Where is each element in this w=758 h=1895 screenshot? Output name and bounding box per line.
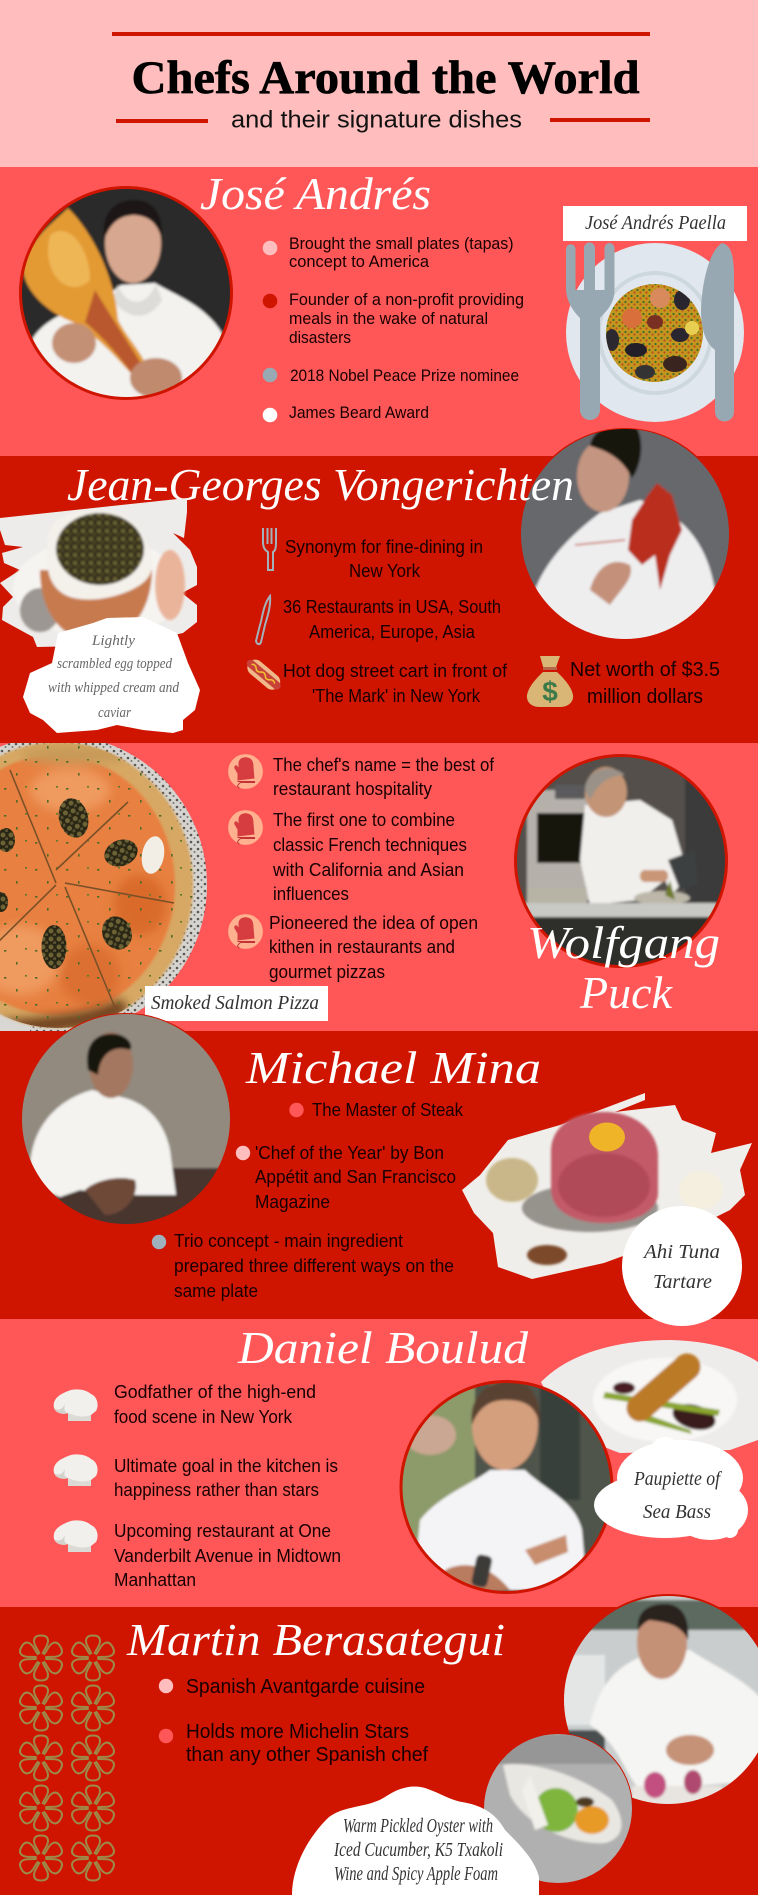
panel: Jean-Georges Vongerichten bbox=[0, 424, 735, 733]
bullet: Spanish Avantgarde: Spanish Avantgarde cuisine bbox=[186, 1675, 425, 1698]
fact: upcoming restaurant: Upcoming restaurant at One bbox=[114, 1520, 331, 1541]
callout cloud: egg description: caviar bbox=[98, 705, 131, 721]
photo: Jean-Georges with lobster bbox=[521, 428, 729, 639]
icon: hot dog bbox=[243, 655, 285, 694]
fact with oven mitt icon: French techniques: classic French techniques bbox=[273, 834, 467, 855]
fact: hot dog cart: Hot dog street cart in front of bbox=[283, 660, 508, 681]
name heading: Michael Mina: Michael Mina bbox=[245, 1042, 541, 1093]
panel: Martin Berasategui bbox=[18, 1590, 758, 1895]
icon: knife outline bbox=[256, 596, 270, 644]
fact with oven mitt icon: French techniques bbox=[228, 809, 467, 904]
icon: fork outline bbox=[263, 528, 276, 570]
bullet: Chef of the Year: 'Chef of the Year' by Bon bbox=[255, 1142, 444, 1163]
bullet list: José Andrés facts: disasters bbox=[289, 329, 351, 347]
dish photo: oyster with foam bbox=[484, 1734, 632, 1883]
bullet list: José Andrés facts: meals in the wake of natural bbox=[289, 310, 488, 328]
bullet list: José Andrés facts: concept to America bbox=[289, 253, 430, 271]
callout blob: oyster description: Wine and Spicy Apple Foam bbox=[334, 1863, 498, 1885]
callout cloud: egg description: with whipped cream and bbox=[48, 680, 179, 696]
callout blob: oyster description: Warm Pickled Oyster with bbox=[343, 1815, 493, 1837]
name heading: Jean-Georges Vongerichten: Jean-Georges Vongerichten bbox=[67, 459, 574, 510]
bullet list: José Andrés facts: Founder of a non-profit providing bbox=[289, 291, 524, 309]
section background: Wolfgang Puck bbox=[0, 743, 758, 1031]
dish photo: caviar egg on white brush bbox=[0, 498, 197, 647]
fact with oven mitt icon: hospitality bbox=[228, 754, 495, 799]
panel: Wolfgang Puck bbox=[0, 735, 735, 1035]
callout blob: oyster description bbox=[292, 1786, 539, 1895]
callout cloud: egg description: Lightly bbox=[91, 633, 135, 649]
name heading: Wolfgang Puck bbox=[527, 917, 720, 1018]
bullet list: José Andrés facts: Brought the small plates (tapas) bbox=[289, 235, 514, 253]
caption: José Andrés Paella: José Andrés Paella bbox=[585, 212, 726, 234]
section background: José Andrés bbox=[0, 167, 758, 456]
subtitle: and their signature dishes bbox=[231, 106, 522, 134]
panel: José Andrés bbox=[15, 168, 747, 422]
caption: José Andrés Paella bbox=[563, 206, 747, 241]
fact: happiness bbox=[114, 1455, 338, 1500]
icon: chef hat 1 bbox=[54, 1389, 98, 1421]
name heading: Wolfgang Puck: Puck bbox=[579, 967, 674, 1018]
bullet: Trio concept: Trio concept - main ingredient bbox=[174, 1230, 403, 1251]
fact with oven mitt icon: hospitality: The chef's name = the best of bbox=[273, 754, 495, 775]
fact: fine dining: New York bbox=[349, 560, 421, 581]
fact with oven mitt icon: open kitchen: kithen in restaurants and bbox=[269, 936, 455, 957]
bullet: Chef of the Year: Magazine bbox=[255, 1191, 330, 1212]
name heading: Martin Berasategui: Martin Berasategui bbox=[126, 1614, 505, 1665]
bullet: Trio concept bbox=[152, 1230, 454, 1301]
fact: restaurants bbox=[283, 596, 501, 642]
photo: Daniel Boulud bbox=[395, 1375, 620, 1600]
section background: Martin Berasategui bbox=[0, 1607, 758, 1895]
icon: chef hat 2 bbox=[54, 1454, 98, 1486]
fact: happiness: happiness rather than stars bbox=[114, 1479, 319, 1500]
panel: header bbox=[112, 32, 650, 134]
dish photo: Paupiette of Sea Bass bbox=[541, 1340, 758, 1453]
bullet list: José Andrés facts: James Beard Award bbox=[289, 404, 429, 422]
fact: restaurants: 36 Restaurants in USA, South bbox=[283, 596, 501, 617]
fact with oven mitt icon: open kitchen: Pioneered the idea of open bbox=[269, 912, 478, 933]
icon: money bag bbox=[527, 656, 573, 707]
fact: Godfather: Godfather of the high-end bbox=[114, 1381, 316, 1402]
caption circle: Ahi Tuna Tartare: Ahi Tuna bbox=[642, 1241, 720, 1263]
fact: Godfather bbox=[114, 1381, 316, 1427]
callout cloud: Paupiette of Sea Bass bbox=[594, 1437, 748, 1540]
caption circle: Ahi Tuna Tartare: Tartare bbox=[653, 1271, 712, 1293]
fact with oven mitt icon: French techniques: with California and Asian bbox=[272, 859, 464, 880]
bullet: Chef of the Year: Appétit and San Francisco bbox=[255, 1166, 456, 1187]
callout cloud: egg description bbox=[23, 617, 200, 733]
dish photo: Ahi Tuna Tartare on white brush bbox=[462, 1093, 752, 1279]
bullet: Michelin Stars: Holds more Michelin Stars bbox=[186, 1720, 409, 1743]
icon: chef hat 3 bbox=[54, 1520, 98, 1552]
photo: José Andrés holding a ham bbox=[19, 186, 233, 400]
fact: upcoming restaurant: Vanderbilt Avenue in Midtown bbox=[114, 1545, 341, 1566]
section background: Daniel Boulud bbox=[0, 1319, 758, 1607]
callout cloud: Paupiette of Sea Bass: Sea Bass bbox=[643, 1501, 711, 1523]
header background bbox=[0, 0, 758, 167]
bullet: Master of Steak: The Master of Steak bbox=[312, 1099, 464, 1120]
fact: restaurants: America, Europe, Asia bbox=[309, 621, 476, 642]
fact: fine dining: Synonym for fine-dining in bbox=[285, 536, 483, 557]
fact with oven mitt icon: French techniques: influences bbox=[273, 883, 349, 904]
bullet: Trio concept: prepared three different ways on the bbox=[174, 1255, 454, 1276]
photo: Martin Berasategui bbox=[555, 1590, 758, 1810]
name heading: Daniel Boulud: Daniel Boulud bbox=[237, 1322, 529, 1373]
fact: upcoming restaurant: Manhattan bbox=[114, 1569, 196, 1590]
caption: Smoked Salmon Pizza bbox=[145, 986, 328, 1021]
name heading: José Andrés: José Andrés bbox=[200, 168, 431, 219]
fact: hot dog cart bbox=[283, 660, 508, 706]
photo: Wolfgang Puck cooking bbox=[514, 754, 728, 968]
fact: fine dining bbox=[285, 536, 483, 581]
section background: Jean-Georges Vongerichten bbox=[0, 456, 758, 743]
dish photo: smoked salmon pizza bbox=[0, 735, 207, 1035]
photo: Michael Mina bbox=[15, 1010, 235, 1230]
section background: Michael Mina bbox=[0, 1031, 758, 1319]
fact with oven mitt icon: French techniques: The first one to combine bbox=[273, 809, 455, 830]
fact: net worth: Net worth of $3.5 bbox=[570, 658, 720, 681]
bullet list: José Andrés facts bbox=[263, 235, 524, 422]
bullet list: José Andrés facts: 2018 Nobel Peace Prize nominee bbox=[290, 367, 519, 385]
fact: hot dog cart: 'The Mark' in New York bbox=[312, 685, 481, 706]
fact: net worth: million dollars bbox=[587, 685, 703, 708]
fact: happiness: Ultimate goal in the kitchen is bbox=[114, 1455, 338, 1476]
caption: Smoked Salmon Pizza: Smoked Salmon Pizza bbox=[151, 992, 319, 1014]
fact with oven mitt icon: open kitchen: gourmet pizzas bbox=[269, 961, 385, 982]
callout cloud: egg description: scrambled egg topped bbox=[57, 656, 172, 672]
bullet: Michelin Stars: than any other Spanish chef bbox=[186, 1743, 428, 1766]
fact: Godfather: food scene in New York bbox=[114, 1406, 293, 1427]
bullet: Chef of the Year bbox=[236, 1142, 456, 1212]
fact with oven mitt icon: open kitchen bbox=[228, 912, 478, 982]
panel: Michael Mina bbox=[15, 1010, 752, 1326]
icon: plate with paella, fork and knife bbox=[566, 243, 744, 422]
bullet: Michelin Stars bbox=[159, 1720, 428, 1766]
title: Chefs Around the World bbox=[132, 52, 640, 104]
fact with oven mitt icon: hospitality: restaurant hospitality bbox=[273, 778, 433, 799]
name heading: Wolfgang Puck: Wolfgang bbox=[527, 917, 720, 968]
callout cloud: Paupiette of Sea Bass: Paupiette of bbox=[633, 1468, 722, 1490]
callout blob: oyster description: Iced Cucumber, K5 Txakoli bbox=[333, 1839, 503, 1861]
icon: money bag: $ bbox=[542, 676, 558, 707]
fact: upcoming restaurant bbox=[114, 1520, 341, 1590]
panel: Daniel Boulud bbox=[54, 1322, 758, 1600]
caption circle: Ahi Tuna Tartare bbox=[622, 1206, 742, 1326]
decorative column of Michelin stars bbox=[18, 1636, 116, 1880]
fact: net worth bbox=[570, 658, 720, 708]
bullet: Trio concept: same plate bbox=[174, 1280, 258, 1301]
